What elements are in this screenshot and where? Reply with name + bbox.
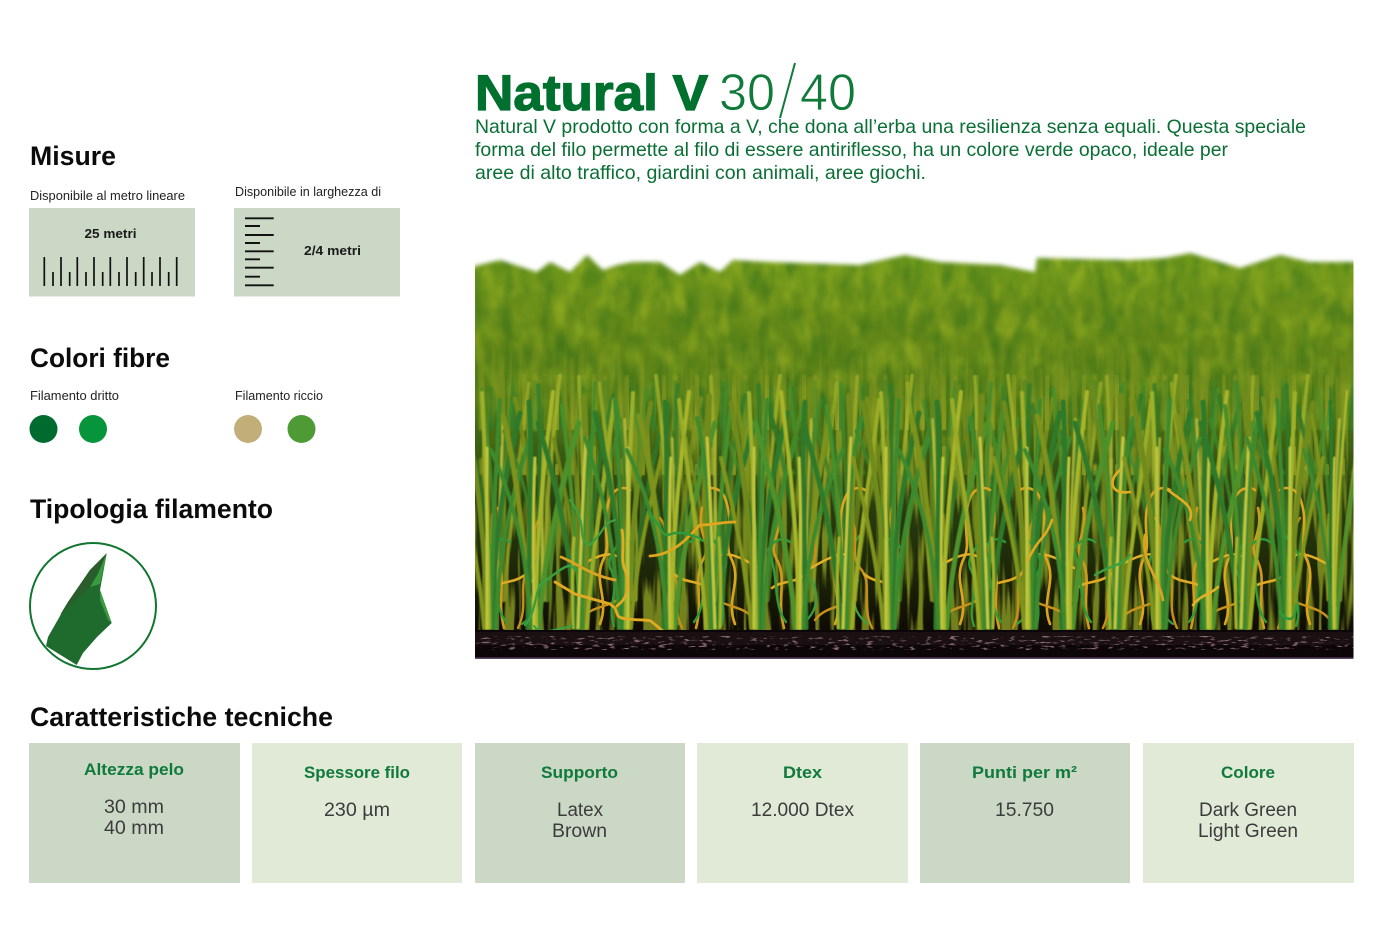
spec card: Supporto: Latex: [557, 800, 603, 821]
intro paragraph: aree di alto traffico, giardini con animali, aree giochi.: [475, 162, 926, 184]
title: 40: [800, 64, 856, 122]
panel: straight filament colours: [30, 389, 119, 443]
spec card: Altezza pelo: Altezza pelo: [84, 760, 184, 779]
photo: artificial grass close-up: [454, 235, 1376, 659]
intro paragraph: [475, 116, 1306, 184]
panel: width availability: Disponibile in larghezza di: [235, 185, 381, 199]
icon: horizontal ruler: [44, 257, 177, 286]
grass: front row tufts: [454, 392, 1365, 628]
spec card: Spessore filo: 230 µm: [324, 800, 390, 821]
icon: vertical ruler: [245, 218, 274, 285]
spec card: Colore: Light Green: [1198, 821, 1298, 842]
panel: linear metre availability: 25 metri: [84, 227, 136, 241]
spec card: Punti per m²: [920, 743, 1130, 883]
heading: Caratteristiche tecniche: Caratteristiche tecniche: [30, 702, 333, 732]
title: 30: [719, 64, 775, 122]
title: Natural V: [475, 65, 709, 121]
panel: width availability: [234, 185, 400, 296]
ragged white top edge of photo: [475, 250, 1354, 278]
heading: Misure: Misure: [30, 141, 116, 171]
panel: straight filament colours: Filamento dritto: [30, 389, 119, 403]
spec card: Altezza pelo: 30 mm: [104, 797, 164, 818]
spec card: Colore: [1143, 743, 1354, 883]
grass: backing mat: [475, 630, 1354, 659]
panel: curly filament colours: [234, 389, 323, 443]
spec card: Dtex: Dtex: [783, 763, 823, 782]
spec card: Spessore filo: Spessore filo: [304, 763, 410, 782]
heading: Tipologia filamento: Tipologia filamento: [30, 494, 273, 524]
spec card: Punti per m²: Punti per m²: [972, 763, 1077, 782]
spec card: Dtex: [697, 743, 908, 883]
panel: linear metre availability: Disponibile al metro lineare: [30, 189, 185, 203]
spec card: Colore: Colore: [1221, 763, 1275, 782]
panel: linear metre availability: [29, 189, 195, 296]
heading: Colori fibre: Colori fibre: [30, 343, 170, 373]
grass: back row tufts: [460, 376, 1365, 600]
panel: curly filament colours: Filamento riccio: [235, 389, 323, 403]
panel: width availability: 2/4 metri: [304, 244, 361, 258]
title: [475, 63, 856, 122]
icon: V-shaped filament in circle: [30, 543, 156, 669]
spec card: Supporto: Supporto: [541, 763, 618, 782]
spec card: Altezza pelo: [29, 743, 240, 883]
spec card: Supporto: Brown: [552, 821, 607, 842]
spec card: Supporto: [475, 743, 685, 883]
spec card: Punti per m²: 15.750: [995, 800, 1054, 821]
intro paragraph: forma del filo permette al filo di essere antiriflesso, ha un colore verde opaco, ideale per: [475, 139, 1228, 161]
spec card: Dtex: 12.000 Dtex: [751, 800, 854, 821]
grass: foreground curly strands: [525, 470, 1296, 637]
grass: curly filaments behind: [488, 488, 1334, 628]
spec card: Spessore filo: [252, 743, 462, 883]
intro paragraph: Natural V prodotto con forma a V, che dona all’erba una resilienza senza equali. Questa speciale: [475, 116, 1306, 138]
spec card: Altezza pelo: 40 mm: [104, 818, 164, 839]
spec card: Colore: Dark Green: [1199, 800, 1297, 821]
